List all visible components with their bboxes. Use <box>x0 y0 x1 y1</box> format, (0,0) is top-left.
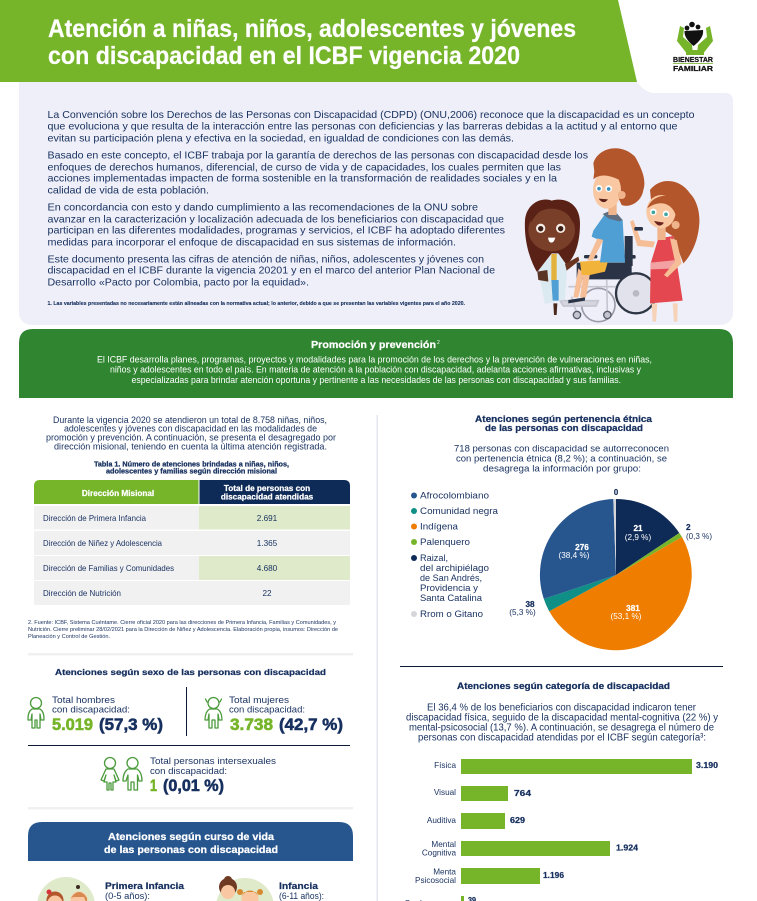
intro text block <box>48 110 695 288</box>
legend: Palenquero <box>420 537 470 548</box>
pie chart: 2 <box>686 523 691 532</box>
intro text block: acciones implementadas impacten de forma sostenible en la transformación de realidades sociales y en la <box>48 174 557 184</box>
stat: women <box>229 695 343 734</box>
text: total served <box>46 415 336 452</box>
table title: Tabla 1. Número de atenciones brindadas a niñas, niños, <box>94 460 289 468</box>
table footnote: Planeación y Control de Gestión. <box>28 634 110 640</box>
stat: men: 5.019 <box>52 715 93 734</box>
intro text block: La Convención sobre los Derechos de las Personas con Discapacidad (CDPD) (ONU,2006) reconoce que la discapacidad es un concepto <box>48 110 695 121</box>
legend: Rrom o Gitano <box>420 609 483 620</box>
stat: intersex: (0,01 %) <box>163 776 224 795</box>
bar chart: 3.190 <box>696 760 718 770</box>
intro text <box>454 444 669 474</box>
pie chart: 276 <box>575 543 589 552</box>
bar chart: 1.924 <box>616 842 638 852</box>
intro text: desagrega la información por grupo: <box>483 464 641 474</box>
table footnote: Nutrición. Cierre preliminar 28/02/2021 para la Dirección de Niñez y Adolescencia. Elaboración propia, insumos: Dirección de <box>28 627 338 633</box>
heading: Atenciones según pertenencia étnica <box>475 414 652 424</box>
table: atenciones por dirección misional: Dirección de Nutrición <box>43 589 121 598</box>
pie chart: (2,9 %) <box>625 533 651 542</box>
heading <box>475 414 652 433</box>
illustration: children, one in a wheelchair <box>525 148 699 322</box>
text: total served: dirección misional, teniendo en cuenta la última atención registrada. <box>54 442 327 452</box>
stat: intersex: Total personas intersexuales <box>150 756 276 766</box>
heading: Atenciones según categoría de discapacidad <box>457 681 670 691</box>
legend: Raizal, <box>420 553 448 564</box>
intro text block: Este documento presenta las cifras de atención de niñas, niños, adolescentes y jóvenes con <box>48 254 484 266</box>
stat: intersex <box>150 756 276 795</box>
bar chart: Cognitiva <box>422 848 456 858</box>
intro text: con pertenencia étnica (8,2 %); a continuación, se <box>456 454 667 464</box>
table: atenciones por dirección misional: Dirección Misional <box>82 489 154 498</box>
table: atenciones por dirección misional: Total de personas con <box>224 484 310 493</box>
legend: Indígena <box>420 522 459 532</box>
panel text <box>97 354 652 385</box>
bar chart: Menta <box>433 868 456 876</box>
intro text block: que evoluciona y que resulta de la interacción entre las personas con deficiencias y las barreras debidas a la actitud y al entorno que <box>48 122 678 132</box>
intro text block: discapacidad en el ICBF durante la vigencia 20201 y en el marco del anterior Plan Nacional de <box>48 266 495 276</box>
icon: childhood children <box>216 876 274 901</box>
text: infancia <box>279 881 324 901</box>
tall girl <box>630 181 699 322</box>
heading banner: de las personas con discapacidad <box>104 844 278 856</box>
table: atenciones por dirección misional: discapacidad atendidas <box>221 492 314 502</box>
intro text: 718 personas con discapacidad se autorreconocen <box>454 444 669 454</box>
panel text: niños y adolescentes en todo el país. En materia de atención a la población con discapacidad, adelanta acciones afirmativas, inclusivas y <box>110 364 641 374</box>
logo: Bienestar Familiar: FAMILIAR <box>673 64 714 73</box>
legend: Comunidad negra <box>420 506 499 517</box>
title: con discapacidad en el ICBF vigencia 2020 <box>48 42 520 70</box>
stat: women: Total mujeres <box>229 695 289 705</box>
legend: Santa Catalina <box>420 593 483 604</box>
bar chart: Física <box>434 761 456 770</box>
panel text: El ICBF desarrolla planes, programas, proyectos y modalidades para la promoción de los derechos y la prevención de vulneraciones en niñas, <box>97 354 652 364</box>
legend <box>411 490 499 620</box>
panel text: especializadas para brindar atención oportuna y pertinente a las necesidades de las personas con discapacidad y sus familias. <box>132 375 621 385</box>
pie chart: 0 <box>614 488 619 497</box>
stat: men: con discapacidad: <box>52 704 130 714</box>
girl in lab coat <box>525 200 580 315</box>
bar chart: 629 <box>510 815 525 825</box>
text: infancia: Infancia <box>279 881 319 892</box>
icon: woman <box>205 698 222 728</box>
legend: Afrocolombiano <box>420 490 489 502</box>
heading: Promoción y prevención <box>311 339 436 351</box>
intro text block: enfoques de derechos humanos, diferencial, de curso de vida y de capacidades, los cuales permiten que las <box>48 162 561 174</box>
intro text block: evitan su participación plena y efectiva en la sociedad, en igualdad de condiciones con las demás. <box>48 134 514 144</box>
table: atenciones por dirección misional: Dirección de Primera Infancia <box>43 514 146 523</box>
section: curso de vida <box>28 822 353 901</box>
pie chart: (38,4 %) <box>559 551 590 560</box>
stat: men: Total hombres <box>52 695 115 705</box>
stat: intersex: 1 <box>150 776 157 795</box>
intro text block: avanzar en la caracterización y localización adecuada de los beneficiarios con discapacidad que <box>48 214 504 226</box>
text block <box>406 702 718 744</box>
stat: intersex: con discapacidad: <box>150 766 227 776</box>
stat: women: (42,7 %) <box>279 715 343 734</box>
heading banner: Atenciones según curso de vida <box>108 831 274 843</box>
intro text block: calidad de vida de esta población. <box>48 186 209 196</box>
table: atenciones por dirección misional: Dirección de Niñez y Adolescencia <box>43 539 162 548</box>
pie chart: 381 <box>626 604 640 613</box>
pie chart: 38 <box>525 600 535 609</box>
heading banner <box>28 822 353 861</box>
intro text block: Basado en este concepto, el ICBF trabaja por la garantía de derechos de las personas con discapacidad desde los <box>48 150 588 162</box>
icon: intersex persons <box>101 758 142 790</box>
pie chart <box>509 488 712 650</box>
text: total served: promoción y prevención. A continuación, se presenta el desagregado por <box>46 432 336 444</box>
bar chart: Auditiva <box>427 816 456 825</box>
table: atenciones por dirección misional: 4.680 <box>257 564 278 573</box>
intro text block: medidas para incorporar el enfoque de discapacidad en sus sistemas de información. <box>48 238 456 248</box>
icon: early childhood children <box>37 877 95 901</box>
text: infancia: (6-11 años): <box>279 891 324 901</box>
stat: men: (57,3 %) <box>99 715 163 734</box>
bar chart: Mental <box>431 840 456 849</box>
text: primera infancia <box>105 881 185 901</box>
section: categoría de discapacidad <box>405 681 718 901</box>
panel: Promoción y prevención: 2 <box>437 340 440 346</box>
table title <box>94 460 289 476</box>
seated boy <box>568 148 644 303</box>
bar chart: 1.196 <box>543 870 564 880</box>
bar chart: Psicosocial <box>415 876 456 885</box>
table title: adolescentes y familias según dirección misional <box>106 466 277 476</box>
intro footnote: 1. Las variables presentadas no necesariamente están alineadas con la normativa actual; lo anterior, debido a que se presentan las variables vigentes para el año 2020. <box>48 301 466 307</box>
legend: Providencia y <box>420 583 478 594</box>
text block: personas con discapacidad atendidas por el ICBF según categoría³: <box>418 732 706 744</box>
text: primera infancia: (0-5 años): <box>105 891 150 901</box>
icon: man <box>28 698 44 728</box>
bar chart <box>405 759 718 901</box>
intro text block: En concordancia con esto y dando cumplimiento a las recomendaciones de la ONU sobre <box>48 202 478 214</box>
stat: women: con discapacidad: <box>229 704 305 714</box>
intro panel background <box>19 82 733 325</box>
pie chart: (5,3 %) <box>509 608 536 617</box>
section: pertenencia étnica <box>411 414 712 650</box>
bar chart: 764 <box>514 788 531 798</box>
table footnote <box>28 620 338 640</box>
header banner <box>0 0 637 82</box>
text: primera infancia: Primera Infancia <box>105 881 185 892</box>
section: atenciones por sexo <box>28 667 350 795</box>
stat: women: 3.738 <box>230 715 273 734</box>
table: atenciones por dirección misional <box>34 480 350 605</box>
table: atenciones por dirección misional: 22 <box>262 589 272 598</box>
title <box>48 15 576 70</box>
pie chart: 21 <box>633 524 643 533</box>
text block: El 36,4 % de los beneficiarios con discapacidad indicaron tener <box>427 702 697 714</box>
logo: Bienestar Familiar <box>673 22 714 73</box>
title: Atención a niñas, niños, adolescentes y jóvenes <box>48 15 576 43</box>
stat: men <box>52 695 163 734</box>
heading: Atenciones según sexo de las personas con discapacidad <box>55 667 326 677</box>
legend: del archipiélago <box>420 563 489 574</box>
table: atenciones por dirección misional: 1.365 <box>257 539 278 548</box>
wheelchair <box>560 236 656 322</box>
pie chart: (53,1 %) <box>611 612 642 621</box>
table: atenciones por dirección misional: Dirección de Familias y Comunidades <box>43 564 174 573</box>
table: atenciones por dirección misional: 2.691 <box>257 514 278 523</box>
column divider <box>376 415 378 901</box>
panel: Promoción y prevención <box>19 329 733 398</box>
table footnote: 2. Fuente: ICBF, Sistema Cuéntame. Cierre oficial 2020 para las direcciones de Primera Infancia, Familias y Comunidades, y <box>28 620 336 626</box>
text block: discapacidad física, seguido de la discapacidad mental-cognitiva (22 %) y <box>406 712 718 724</box>
logo: Bienestar Familiar: BIENESTAR <box>673 55 714 64</box>
pie chart: (0,3 %) <box>686 532 712 541</box>
bar chart: Visual <box>434 788 456 797</box>
heading: de las personas con discapacidad <box>485 423 643 433</box>
text: total served: Durante la vigencia 2020 se atendieron un total de 8.758 niñas, niños, <box>53 415 327 426</box>
text block: mental-psicosocial (13,7 %). A continuación, se desagrega el número de <box>409 722 714 734</box>
intro text block: participan en las diferentes modalidades, programas y servicios, el ICBF ha adoptado diferentes <box>48 226 505 236</box>
legend: de San Andrés, <box>420 573 482 584</box>
text: total served: adolescentes y jóvenes con discapacidad en las modalidades de <box>64 424 317 434</box>
intro text block: Desarrollo «Pacto por Colombia, pacto por la equidad». <box>48 278 309 288</box>
